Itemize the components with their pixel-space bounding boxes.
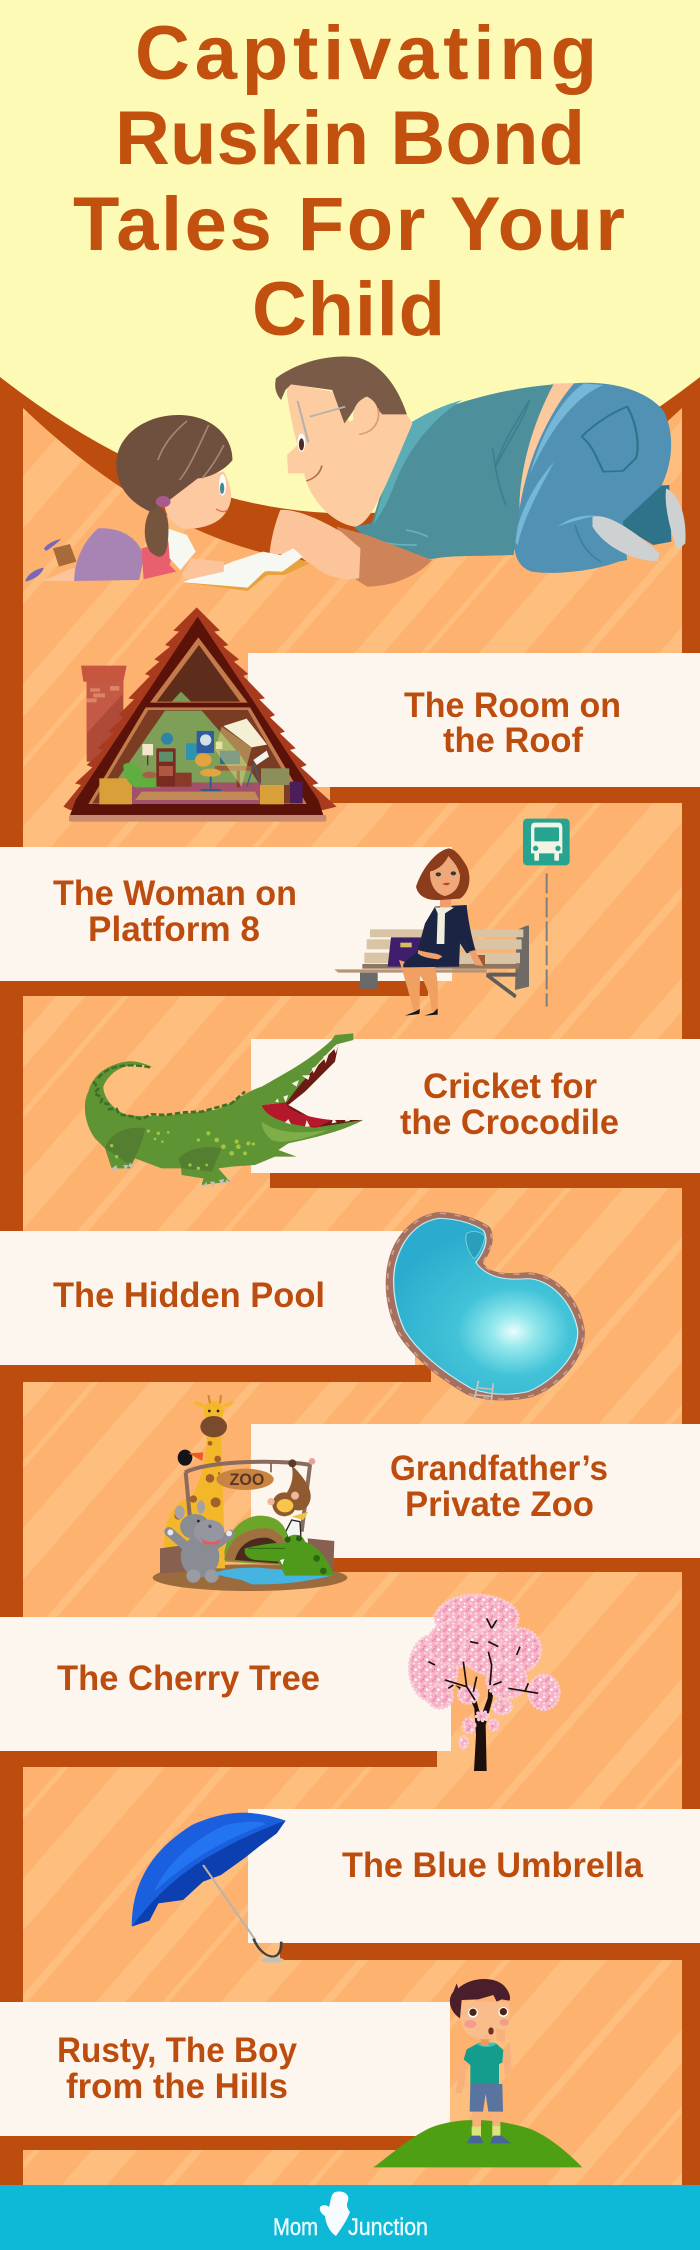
pool water — [394, 1218, 578, 1394]
girl legs and shoes — [25, 539, 79, 582]
father ear line — [359, 408, 379, 434]
title: Captivating — [135, 11, 597, 96]
boy shorts — [470, 2084, 503, 2112]
story title: the Roof — [443, 721, 583, 760]
father forearm — [269, 510, 360, 579]
lamp — [142, 744, 153, 765]
boy eyes — [468, 2007, 508, 2018]
armchair — [123, 763, 160, 787]
story title — [400, 1067, 619, 1142]
panel: Cricket for the Crocodile — [85, 1033, 700, 1188]
story title: the Crocodile — [400, 1103, 619, 1142]
bus sign — [523, 819, 570, 865]
teeth — [275, 1046, 363, 1127]
panel background — [0, 1617, 451, 1751]
father head — [287, 383, 412, 527]
cave mound — [224, 1516, 288, 1565]
hippo — [167, 1500, 232, 1583]
scale spots — [110, 1129, 255, 1170]
hill — [373, 2120, 582, 2167]
boy neck — [481, 2037, 489, 2046]
hair highlights — [158, 421, 224, 480]
pool ladder — [474, 1381, 493, 1404]
illustration: cherry blossom tree — [409, 1595, 559, 1771]
father back skin — [520, 383, 574, 508]
pool rim — [386, 1212, 585, 1400]
roof frame — [70, 617, 323, 815]
crocodile body — [85, 1033, 363, 1185]
illustration: crocodile — [85, 1033, 363, 1188]
woman hand — [418, 950, 483, 966]
panel background — [0, 847, 452, 981]
canopy highlight — [154, 1822, 266, 1892]
story title: The Room on — [404, 686, 621, 725]
desk and monitor — [175, 751, 252, 787]
crocodile — [245, 1535, 334, 1576]
globe — [161, 733, 173, 745]
boy mouth — [488, 2027, 494, 2035]
hair tie — [156, 496, 170, 507]
header curved band — [0, 370, 700, 564]
woman shoes — [405, 1008, 438, 1016]
green wall — [115, 711, 258, 783]
boy shirt — [464, 2044, 503, 2085]
pond — [213, 1568, 335, 1584]
panel: The Room on the Roof — [63, 607, 700, 822]
claws — [112, 1162, 232, 1188]
logo text Mom: Mom — [273, 2214, 318, 2241]
story title — [57, 2031, 297, 2106]
logo text Junction: Junction — [348, 2214, 428, 2241]
loft gable window — [172, 692, 191, 702]
panel background — [248, 653, 700, 787]
hook — [254, 1939, 281, 1956]
pool steps — [466, 1232, 485, 1259]
office chair — [195, 753, 221, 790]
bus stop pole — [544, 873, 550, 1007]
floor — [105, 783, 272, 804]
panel background — [251, 1424, 700, 1558]
panel: Rusty, The Boy from the Hills — [0, 1979, 582, 2167]
story title: The Hidden Pool — [53, 1276, 325, 1315]
father lower leg — [614, 485, 671, 545]
cardboard boxes — [99, 768, 289, 804]
boy socks — [472, 2126, 500, 2137]
woman neck — [440, 895, 452, 908]
illustration: swimming pool — [386, 1212, 585, 1404]
story title: The Woman on — [53, 874, 297, 913]
coffee cup — [477, 955, 485, 966]
tail ridge — [98, 1065, 152, 1078]
story title: The Cherry Tree — [57, 1659, 320, 1698]
trunk — [455, 1665, 494, 1771]
story title: Platform 8 — [88, 910, 260, 949]
MomJunction logo — [273, 2191, 428, 2241]
father front shoe — [592, 516, 660, 561]
panel: The Blue Umbrella — [132, 1809, 700, 1963]
title: Ruskin Bond — [115, 96, 585, 181]
handbag — [388, 937, 424, 967]
girl arm — [181, 558, 224, 580]
boy legs — [472, 2110, 500, 2137]
story title: Private Zoo — [405, 1485, 594, 1524]
monkey — [267, 1459, 311, 1520]
woman blouse — [435, 907, 454, 944]
illustration: father and daughter reading — [25, 357, 686, 591]
story title — [53, 874, 297, 949]
story title — [390, 1449, 608, 1524]
girl eye — [219, 474, 226, 496]
rim blocks — [387, 1213, 583, 1399]
woman suit — [403, 905, 476, 967]
panel: The Woman on Platform 8 — [0, 819, 570, 1016]
ground — [153, 1564, 347, 1591]
father smile — [306, 466, 322, 481]
title: Child — [252, 267, 445, 352]
blossom canopy — [409, 1595, 559, 1748]
bookshelf — [156, 748, 176, 787]
open book — [183, 548, 310, 591]
panel: The Hidden Pool — [0, 1212, 585, 1404]
girl smile — [216, 509, 227, 512]
chimney — [81, 666, 127, 762]
panel: Grandfather's Private Zoo — [153, 1395, 700, 1591]
father ear — [353, 397, 379, 433]
posters — [186, 731, 222, 760]
girl top — [141, 542, 176, 579]
logo mother and child icon — [320, 2191, 350, 2236]
panel background — [0, 1231, 415, 1365]
panel background — [251, 1039, 700, 1173]
zoo sign: ZOO — [230, 1470, 264, 1489]
story title: Grandfather’s — [390, 1449, 608, 1488]
illustration: attic house — [63, 607, 337, 822]
girl head — [165, 472, 231, 529]
crocodile shading — [105, 1122, 328, 1172]
boy cheeks — [464, 2019, 509, 2028]
title: Tales For Your — [73, 182, 625, 267]
shaft — [203, 1865, 255, 1940]
room — [88, 707, 307, 804]
purple cloth — [290, 782, 303, 803]
title — [73, 11, 625, 352]
illustration: blue umbrella — [132, 1813, 286, 1963]
girl hair — [116, 415, 233, 512]
father glasses — [298, 401, 345, 442]
canopy top — [132, 1813, 286, 1927]
woman face — [430, 856, 460, 896]
canopy underside — [132, 1821, 286, 1927]
panel background — [0, 2002, 450, 2136]
story title: The Blue Umbrella — [342, 1846, 644, 1885]
panel background — [248, 1809, 700, 1943]
gutter — [69, 815, 326, 822]
zebra stripes — [286, 1520, 301, 1539]
telescope — [247, 751, 269, 787]
woman legs — [399, 960, 438, 1012]
branches — [428, 1618, 538, 1700]
shirt highlight and folds — [373, 400, 530, 545]
crocodile back spines — [93, 1082, 245, 1119]
toucan — [178, 1450, 203, 1466]
panel: The Cherry Tree — [0, 1595, 559, 1771]
illustration: boy on hill — [373, 1979, 582, 2167]
zoo sign — [216, 1463, 274, 1490]
illustration: zoo — [153, 1395, 347, 1591]
girl sleeve — [167, 528, 196, 570]
father jeans — [514, 383, 671, 573]
story title: from the Hills — [66, 2067, 288, 2106]
boy hand — [496, 2028, 505, 2042]
mouth interior — [262, 1045, 363, 1128]
girl ponytail — [145, 505, 168, 557]
skylight — [223, 719, 267, 747]
father shirt — [354, 384, 553, 559]
girl dress — [74, 528, 144, 581]
tree stumps — [160, 1538, 334, 1573]
boy arm — [455, 2042, 512, 2093]
upper loft — [150, 637, 248, 703]
story title — [404, 686, 621, 760]
shirt collar — [477, 2043, 497, 2047]
father upper arm — [337, 527, 432, 587]
header yellow background — [0, 0, 700, 514]
story title: Cricket for — [423, 1067, 597, 1106]
illustration: woman on bench at bus stop — [334, 819, 570, 1016]
boy shoes — [467, 2136, 511, 2143]
woman hair — [416, 848, 469, 900]
handle shadow — [261, 1957, 284, 1963]
father back shoe — [666, 488, 686, 550]
zoo gate — [185, 1458, 315, 1532]
giraffe — [164, 1395, 234, 1568]
story title: Rusty, The Boy — [57, 2031, 297, 2070]
roof tiles — [63, 607, 337, 810]
father eye — [298, 434, 305, 452]
boy head — [459, 2002, 510, 2039]
footer bar — [0, 2185, 700, 2250]
boy hair — [450, 1979, 510, 2018]
father hair — [275, 357, 407, 423]
bench — [334, 926, 529, 998]
jeans highlights and pocket — [514, 383, 638, 562]
